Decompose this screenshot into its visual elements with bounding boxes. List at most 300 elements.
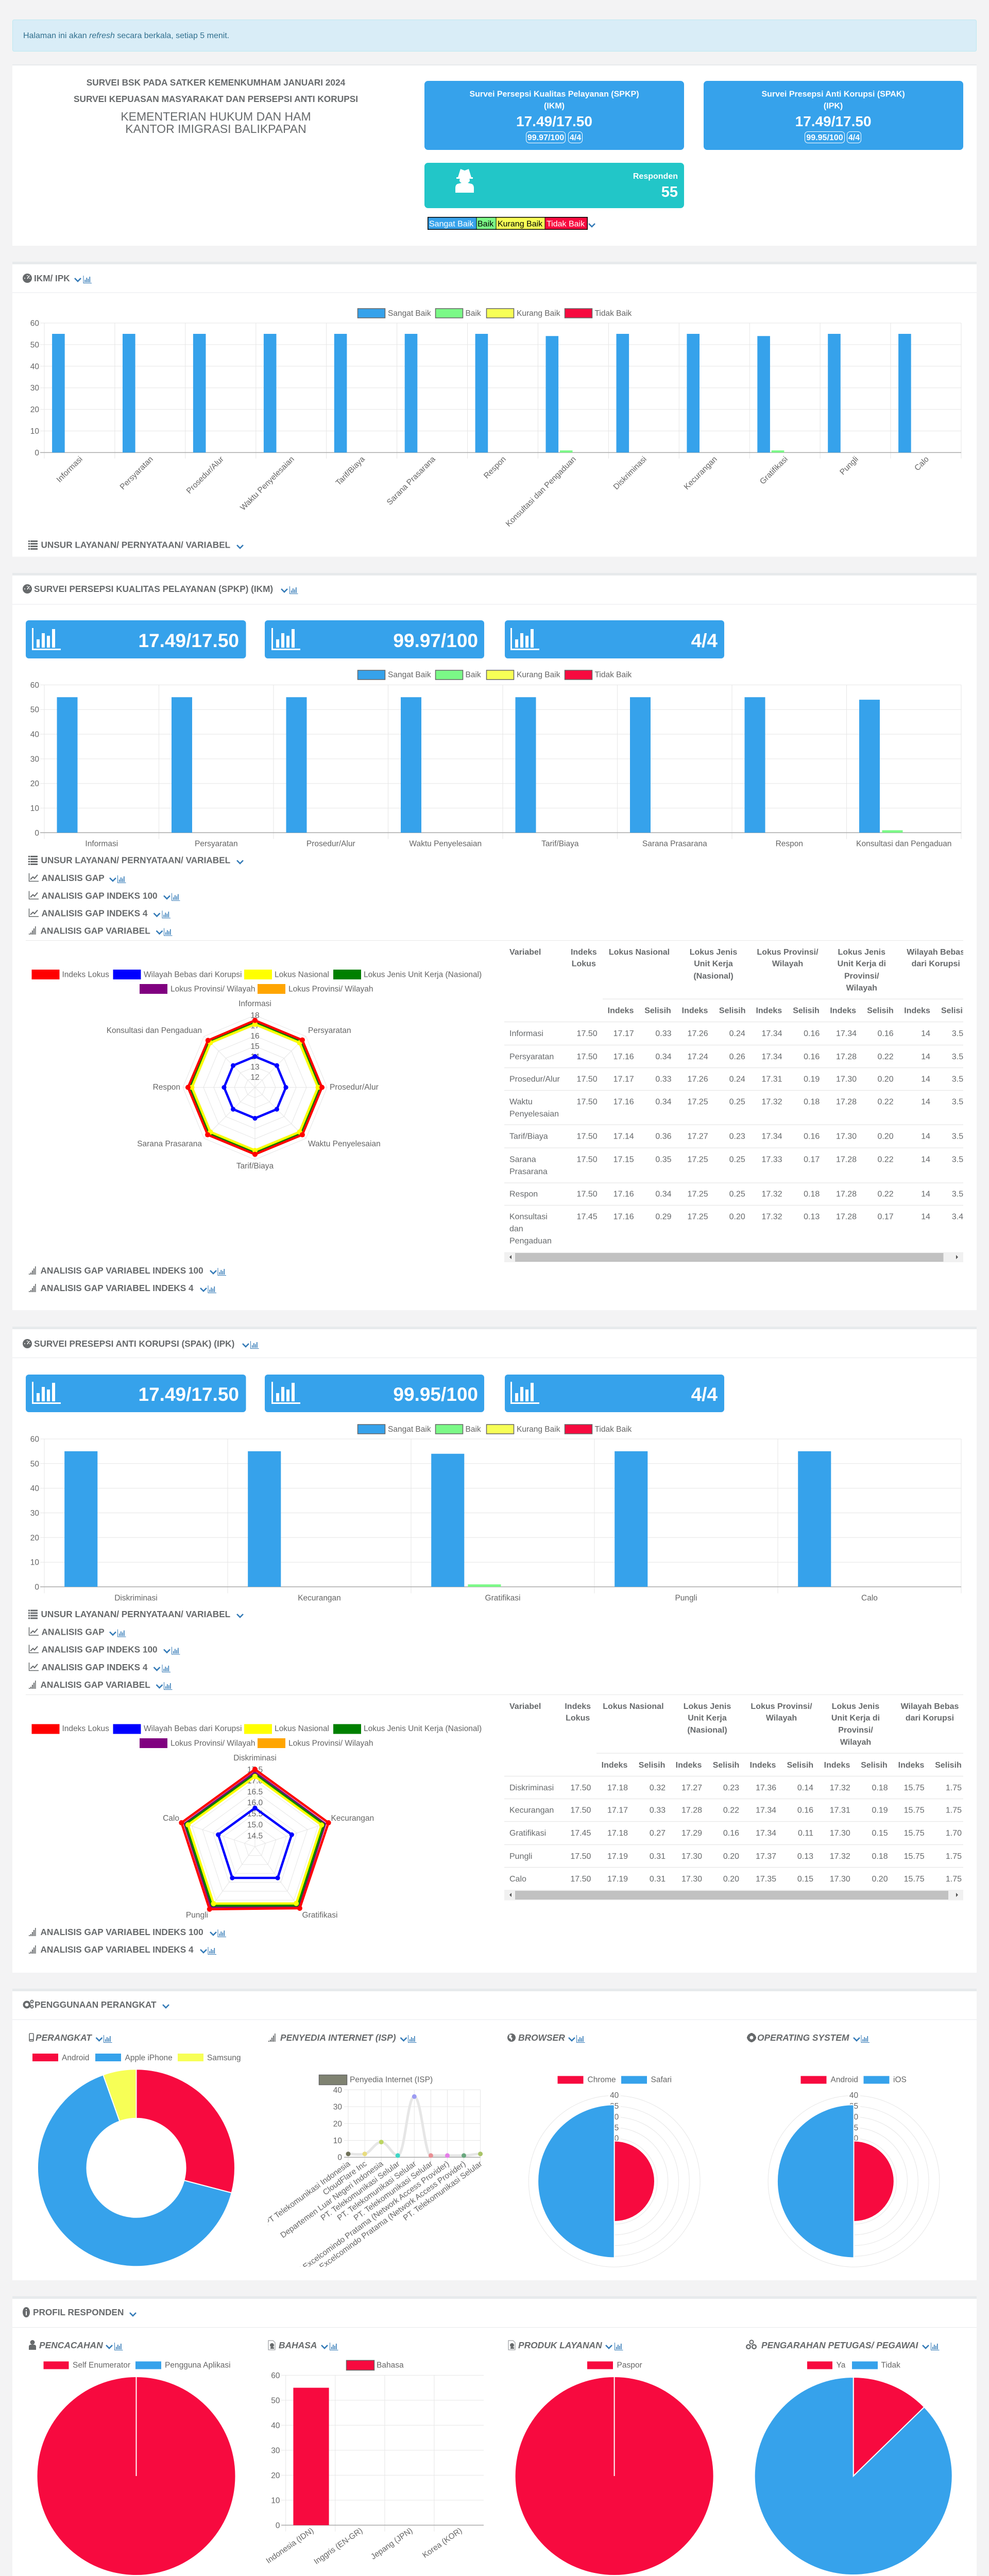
bar chart: SPAK: Kecurangan [298, 1594, 341, 1602]
table: SPKP gap variabel: 0.19 [804, 1075, 820, 1084]
table: SPKP gap variabel: 0.25 [729, 1190, 745, 1198]
bar chart: all variables: Gratifikasi [758, 455, 790, 486]
table: SPKP gap variabel: Konsultasi [509, 1213, 548, 1221]
bar chart: all variables: Pungli [838, 455, 860, 477]
title block: SURVEI KEPUASAN MASYARAKAT DAN PERSEPSI ANTI KORUPSI [74, 94, 358, 104]
bar chart: all variables: 10 [30, 427, 39, 436]
table: SPAK gap variabel: dari Korupsi [906, 1714, 954, 1723]
radar legend: Lokus Provinsi/ Wilayah [288, 985, 373, 993]
table: SPAK gap variabel: 17.27 [681, 1784, 702, 1792]
sub-panel: produk layanan [508, 2340, 713, 2575]
stat card: score [26, 620, 246, 658]
table: SPKP gap variabel: Indeks [608, 1007, 634, 1015]
table: SPAK gap variabel: Selisih [787, 1761, 813, 1770]
table: SPAK gap variabel: Lokus Jenis [832, 1702, 879, 1711]
line chart [263, 2086, 484, 2279]
line chart: PT Telekomunikasi Indonesia [263, 2159, 352, 2227]
heading: PRODUK LAYANAN [518, 2340, 602, 2350]
polar area chart: 30 [610, 2113, 619, 2122]
table: SPKP gap variabel: 17.17 [613, 1075, 634, 1084]
heading: gap variabel indeks 100: ANALISIS GAP VARIABEL INDEKS 100 [40, 1265, 203, 1276]
radar legend: Lokus Provinsi/ Wilayah [288, 1739, 373, 1748]
card: SPKP IKM: 99.97/100 [527, 133, 564, 142]
table: SPKP gap variabel: Unit Kerja di [838, 959, 886, 969]
table: SPKP gap variabel: 0.34 [655, 1190, 672, 1198]
table: SPKP gap variabel: Indeks [756, 1007, 782, 1015]
table: SPAK gap variabel: 17.34 [756, 1829, 776, 1838]
table: SPAK gap variabel: 1.75 [946, 1875, 962, 1884]
table: SPKP gap variabel: 17.50 [577, 1053, 598, 1061]
table: SPAK gap variabel: Wilayah [840, 1738, 871, 1747]
table: SPKP gap variabel: 17.34 [761, 1053, 782, 1061]
table: SPKP gap variabel: Provinsi/ [844, 972, 879, 981]
table: SPKP gap variabel: 0.18 [804, 1097, 820, 1107]
table: SPAK gap variabel: 17.19 [607, 1852, 628, 1861]
line chart: PT. Telekomunikasi Selular [319, 2159, 401, 2223]
bar chart: SPKP [30, 681, 961, 848]
table: SPKP gap variabel: 17.33 [761, 1155, 782, 1164]
table: SPAK gap variabel: 15.75 [904, 1806, 925, 1815]
table: SPKP gap variabel: 0.20 [877, 1075, 894, 1084]
table: SPKP gap variabel: 17.32 [761, 1190, 782, 1198]
legend [319, 2075, 433, 2084]
stat card: score: 17.49/17.50 [139, 1384, 239, 1405]
table: SPKP gap variabel: 17.16 [613, 1190, 634, 1198]
legend: Baik [466, 309, 481, 318]
radar chart: SPAK gap variabel: 15.5 [247, 1809, 263, 1819]
pie chart [516, 2377, 713, 2575]
heading: PERANGKAT [36, 2032, 92, 2043]
table: SPAK gap variabel: 1.75 [946, 1852, 962, 1861]
bar chart: SPAK: Gratifikasi [485, 1594, 520, 1602]
line chart: PT Excelcomindo Pratama (Network Access Provider) [292, 2159, 451, 2279]
table: SPKP gap variabel: 0.20 [729, 1213, 745, 1221]
table: SPAK gap variabel: 15.75 [904, 1829, 925, 1838]
radar chart: SPKP gap variabel: 15 [250, 1042, 260, 1051]
sub-panel: bahasa [265, 2340, 484, 2566]
table: SPAK gap variabel: Indeks [565, 1702, 591, 1711]
bar chart: SPKP: 20 [30, 779, 39, 788]
table: SPKP gap variabel: 17.26 [688, 1029, 708, 1038]
legend: Baik [466, 671, 481, 679]
table: SPKP gap variabel: Selisih [644, 1007, 671, 1015]
table: SPKP gap variabel: 0.16 [804, 1132, 820, 1141]
table: SPKP gap variabel [504, 948, 968, 1246]
line chart: CloudFlare Inc [321, 2159, 369, 2197]
table: SPKP gap variabel: Pengaduan [509, 1236, 552, 1246]
table: SPKP gap variabel: 3.50 [952, 1155, 968, 1164]
bar chart: SPAK: Calo [861, 1594, 878, 1602]
table scrollbar [504, 1890, 963, 1900]
table: SPKP gap variabel: 0.25 [729, 1155, 745, 1164]
table: SPKP gap variabel: Tarif/Biaya [509, 1132, 548, 1141]
heading: IKM/IPK: IKM/ IPK [34, 273, 70, 283]
table: SPAK gap variabel: Diskriminasi [509, 1784, 554, 1792]
table: SPKP gap variabel: 3.50 [952, 1075, 968, 1084]
stat card: index 4 [505, 620, 724, 658]
table: SPKP gap variabel: 0.22 [877, 1053, 894, 1061]
legend: Tidak Baik [594, 671, 632, 679]
legend [587, 2361, 642, 2370]
bar chart: SPKP: 0 [35, 829, 39, 838]
table: SPAK gap variabel: 17.28 [681, 1806, 702, 1815]
table: SPKP gap variabel: 17.50 [577, 1132, 598, 1141]
card: SPKP IKM: (IKM) [544, 102, 565, 110]
table: SPKP gap variabel: Indeks [571, 948, 597, 957]
table: SPKP gap variabel: 17.26 [688, 1075, 708, 1084]
bar chart: SPKP: Tarif/Biaya [541, 840, 579, 848]
table: SPAK gap variabel: Kecurangan [509, 1806, 554, 1815]
table: SPKP gap variabel: 14 [921, 1075, 930, 1084]
table: SPKP gap variabel: 17.50 [577, 1155, 598, 1164]
heading: analisis gap indeks 100: ANALISIS GAP INDEKS 100 [41, 1645, 158, 1655]
radar legend: Indeks Lokus [62, 1724, 109, 1733]
radar chart: SPAK gap variabel: Pungli [186, 1911, 208, 1920]
table: SPKP gap variabel: Lokus [572, 959, 596, 969]
table: SPAK gap variabel: 17.18 [607, 1784, 628, 1792]
table: SPAK gap variabel: Selisih [639, 1761, 665, 1770]
polar area chart: 40 [610, 2091, 619, 2100]
table: SPKP gap variabel: 0.29 [655, 1213, 672, 1221]
table: SPAK gap variabel: Selisih [861, 1761, 888, 1770]
table: SPKP gap variabel: 17.28 [836, 1155, 857, 1164]
radar chart: SPAK gap variabel: 17.0 [247, 1776, 263, 1786]
card: SPAK IPK: 99.95/100 [806, 133, 843, 142]
table: SPAK gap variabel: 0.22 [723, 1806, 739, 1815]
heading: analisis gap: ANALISIS GAP [41, 873, 105, 883]
table: SPKP gap variabel: 17.28 [836, 1053, 857, 1061]
table: SPKP gap variabel: 17.31 [761, 1075, 782, 1084]
line chart: Departemen Luar Negeri Indonesia [279, 2159, 385, 2240]
card: SPAK IPK: 17.49/17.50 [795, 113, 872, 129]
heading: penggunaan perangkat: PENGGUNAAN PERANGKAT [35, 1999, 157, 2010]
legend: rating categories: Sangat Baik [429, 219, 474, 229]
card: responden: Responden [633, 172, 678, 181]
table: SPKP gap variabel: 17.34 [761, 1132, 782, 1141]
table: SPKP gap variabel: Lokus Provinsi/ [757, 948, 819, 957]
alert: refresh notice: Halaman ini akan refresh secara berkala, setiap 5 menit. [23, 31, 229, 40]
legend: Sangat Baik [388, 309, 431, 318]
bar chart: Jepang (JPN) [369, 2526, 414, 2562]
table: SPKP gap variabel: Unit Kerja [694, 959, 733, 969]
table: SPKP gap variabel: Selisih [719, 1007, 745, 1015]
table: SPAK gap variabel: 17.30 [830, 1829, 850, 1838]
bar chart: SPKP: 60 [30, 681, 39, 690]
heading [29, 2032, 112, 2043]
radar legend: Lokus Provinsi/ Wilayah [170, 1739, 255, 1748]
table: SPAK gap variabel: 0.15 [872, 1829, 888, 1838]
table: SPAK gap variabel: 17.31 [830, 1806, 850, 1815]
table: SPAK gap variabel: 0.27 [650, 1829, 666, 1838]
table: SPAK gap variabel: 0.31 [650, 1852, 666, 1861]
table: SPKP gap variabel: Lokus Jenis [690, 948, 737, 957]
heading: unsur layanan: UNSUR LAYANAN/ PERNYATAAN/ VARIABEL [41, 540, 230, 550]
heading: analisis gap variabel: ANALISIS GAP VARIABEL [40, 1680, 150, 1690]
bar chart: SPAK: Diskriminasi [114, 1594, 158, 1602]
bar chart: 0 [276, 2521, 280, 2530]
table: SPAK gap variabel: Wilayah Bebas [901, 1702, 959, 1711]
table: SPKP gap variabel: 0.16 [877, 1029, 894, 1038]
table: SPAK gap variabel: Gratifikasi [509, 1829, 546, 1838]
table: SPAK gap variabel: Calo [509, 1875, 526, 1884]
table: SPKP gap variabel: 0.20 [877, 1132, 894, 1141]
legend [32, 2054, 241, 2062]
table: SPAK gap variabel: Indeks [824, 1761, 850, 1770]
bar chart: 60 [271, 2371, 280, 2380]
table: SPAK gap variabel: 0.16 [723, 1829, 739, 1838]
bar chart: SPAK [30, 1435, 961, 1602]
polar area chart: 20 [849, 2134, 858, 2143]
icon: user secret [455, 169, 474, 193]
table: SPKP gap variabel: 17.16 [613, 1097, 634, 1107]
table: SPKP gap variabel: 0.17 [877, 1213, 894, 1221]
radar chart: SPAK gap variabel: 17.5 [247, 1766, 263, 1774]
table: SPAK gap variabel: 17.50 [570, 1852, 591, 1861]
radar chart: SPAK gap variabel: Gratifikasi [302, 1911, 337, 1920]
card: SPAK IPK: (IPK) [824, 102, 843, 110]
table: SPKP gap variabel: Selisih [941, 1007, 968, 1015]
radar chart: SPKP gap variabel: 14 [250, 1053, 260, 1061]
table: SPKP gap variabel: 0.22 [877, 1155, 894, 1164]
title block: KANTOR IMIGRASI BALIKPAPAN [125, 122, 306, 135]
table: SPAK gap variabel: 0.31 [650, 1875, 666, 1884]
table: SPAK gap variabel: Selisih [713, 1761, 739, 1770]
radar chart: SPAK gap variabel: 15.0 [247, 1821, 263, 1829]
stat card: index 100: 99.95/100 [393, 1384, 478, 1405]
table: SPAK gap variabel: Provinsi/ [838, 1726, 873, 1735]
table: SPAK gap variabel: 17.32 [830, 1784, 850, 1792]
table: SPAK gap variabel: 0.20 [723, 1875, 739, 1884]
table: SPAK gap variabel: 0.13 [797, 1852, 813, 1861]
table: SPAK gap variabel: 1.75 [946, 1806, 962, 1815]
radar legend: Lokus Nasional [275, 1724, 329, 1733]
table: SPKP gap variabel: Sarana [509, 1155, 536, 1164]
table: SPAK gap variabel: 0.32 [650, 1784, 666, 1792]
heading: OPERATING SYSTEM [757, 2032, 849, 2043]
panel: SPKP IKM [12, 573, 977, 1310]
table: SPKP gap variabel: 0.22 [877, 1190, 894, 1198]
table: SPKP gap variabel: Respon [509, 1190, 538, 1198]
table: SPKP gap variabel: 17.30 [836, 1132, 857, 1141]
table: SPAK gap variabel: 0.33 [650, 1806, 666, 1815]
table: SPAK gap variabel: 1.75 [946, 1784, 962, 1792]
table: SPAK gap variabel: 17.37 [756, 1852, 776, 1861]
bar chart: SPKP: Respon [776, 840, 803, 848]
legend: rating categories: Tidak Baik [547, 219, 585, 229]
polar area chart [768, 2091, 940, 2267]
table: SPKP gap variabel: 17.25 [688, 1097, 708, 1107]
radar chart: SPKP gap variabel: Respon [153, 1083, 180, 1092]
table scrollbar [504, 1252, 963, 1262]
legend: Chrome [587, 2075, 616, 2084]
legend: Bahasa [377, 2361, 404, 2370]
polar area chart: 30 [849, 2113, 858, 2122]
radar chart: SPKP gap variabel: Konsultasi dan Pengaduan [107, 1026, 202, 1035]
bar chart: SPAK: 30 [30, 1509, 39, 1518]
bar chart: SPKP: 10 [30, 804, 39, 813]
bar chart: SPKP: 30 [30, 755, 39, 764]
table: SPAK gap variabel: Indeks [602, 1761, 627, 1770]
heading: gap variabel indeks 4: ANALISIS GAP VARIABEL INDEKS 4 [40, 1283, 194, 1293]
table: SPAK gap variabel: 17.45 [570, 1829, 591, 1838]
table: SPAK gap variabel: Indeks [676, 1761, 702, 1770]
table: SPKP gap variabel: 0.17 [804, 1155, 820, 1164]
table: SPAK gap variabel: 17.34 [756, 1806, 776, 1815]
table: SPAK gap variabel: 0.19 [872, 1806, 888, 1815]
bar chart: 10 [271, 2496, 280, 2505]
table: SPAK gap variabel: 17.32 [830, 1852, 850, 1861]
table: SPAK gap variabel: 0.18 [872, 1784, 888, 1792]
stat card: index 100 [265, 620, 484, 658]
heading [29, 2340, 123, 2350]
heading: analisis gap variabel: ANALISIS GAP VARIABEL [40, 925, 150, 936]
table: SPKP gap variabel: 14 [921, 1097, 930, 1107]
table: SPKP gap variabel: (Nasional) [693, 972, 734, 981]
radar chart: SPKP gap variabel: 18 [250, 1011, 260, 1020]
line chart: PT. Telekomunikasi Selular [352, 2159, 434, 2223]
bar chart: all variables: Calo [913, 455, 931, 472]
bar chart: SPAK: 10 [30, 1558, 39, 1567]
bar chart: Indonesia (IDN) [265, 2526, 315, 2566]
title block: KEMENTERIAN HUKUM DAN HAM [121, 110, 311, 123]
title block: SURVEI BSK PADA SATKER KEMENKUMHAM JANUARI 2024 [87, 77, 346, 88]
card: SPAK IPK [704, 81, 963, 150]
bar chart: Inggris (EN-GR) [313, 2526, 364, 2566]
sub-panel: ISP [263, 2032, 484, 2279]
bar chart: SPKP: Sarana Prasarana [642, 840, 707, 848]
pie chart [755, 2377, 952, 2575]
table: SPAK gap variabel: Selisih [935, 1761, 962, 1770]
panel: SPAK IPK [12, 1327, 977, 1973]
heading: unsur layanan: UNSUR LAYANAN/ PERNYATAAN/ VARIABEL [41, 855, 230, 866]
radar legend: Wilayah Bebas dari Korupsi [144, 971, 242, 979]
legend: Android [62, 2054, 89, 2062]
legend [346, 2361, 404, 2370]
table: SPKP gap variabel: Selisih [867, 1007, 894, 1015]
bar chart: SPAK: 60 [30, 1435, 39, 1444]
radar chart: SPKP gap variabel: 16 [250, 1032, 260, 1041]
radar legend: Lokus Nasional [275, 971, 329, 979]
legend: iOS [893, 2075, 907, 2084]
table: SPKP gap variabel: Lokus Nasional [609, 948, 670, 957]
heading: analisis gap indeks 100: ANALISIS GAP INDEKS 100 [41, 890, 158, 901]
table: SPKP gap variabel: Prosedur/Alur [509, 1075, 560, 1084]
legend: Samsung [207, 2054, 241, 2062]
table: SPAK gap variabel: Indeks [750, 1761, 776, 1770]
table: SPKP gap variabel: 3.45 [952, 1213, 968, 1221]
polar area chart: 40 [849, 2091, 858, 2100]
polar area chart: 25 [849, 2124, 858, 2132]
table: SPAK gap variabel: Lokus Jenis [684, 1702, 731, 1711]
bar chart: all variables: Diskriminasi [612, 455, 649, 492]
card: SPKP IKM [424, 81, 684, 150]
bar chart: SPAK: 50 [30, 1460, 39, 1468]
table: SPKP gap variabel: 0.22 [877, 1097, 894, 1107]
legend [807, 2361, 900, 2370]
bar chart: all variables: 0 [35, 449, 39, 457]
table: SPAK gap variabel: Unit Kerja [688, 1714, 727, 1723]
stat card: index 100 [265, 1375, 484, 1412]
bar chart: 50 [271, 2396, 280, 2405]
donut chart [38, 2069, 235, 2266]
legend: Self Enumerator [73, 2361, 130, 2370]
radar legend: Indeks Lokus [62, 971, 109, 979]
legend: Baik [466, 1425, 481, 1434]
table: SPKP gap variabel: 0.25 [729, 1097, 745, 1107]
table: SPAK gap variabel: 0.18 [872, 1852, 888, 1861]
heading: analisis gap indeks 4: ANALISIS GAP INDEKS 4 [41, 908, 148, 918]
panel: device usage [12, 1989, 977, 2280]
table: SPKP gap variabel: 0.26 [729, 1053, 745, 1061]
table: SPKP gap variabel: 17.17 [613, 1029, 634, 1038]
bar chart: 40 [271, 2421, 280, 2430]
line chart: 20 [333, 2120, 342, 2128]
line chart: 30 [333, 2103, 342, 2111]
table: SPAK gap variabel: 0.11 [798, 1829, 813, 1838]
table: SPKP gap variabel: Wilayah Bebas [907, 948, 965, 957]
bar chart: Korea (KOR) [421, 2526, 464, 2560]
table: SPKP gap variabel: 0.33 [655, 1029, 672, 1038]
heading: gap variabel indeks 100: ANALISIS GAP VARIABEL INDEKS 100 [40, 1927, 203, 1937]
heading [268, 2340, 338, 2350]
table: SPKP gap variabel: 17.45 [577, 1213, 598, 1221]
table: SPKP gap variabel: 17.34 [836, 1029, 857, 1038]
table: SPAK gap variabel: (Nasional) [687, 1726, 727, 1735]
table: SPKP gap variabel: 0.24 [729, 1029, 745, 1038]
panel: survey summary [12, 64, 977, 246]
polar area chart: 20 [610, 2134, 619, 2143]
card: SPAK IPK: Survei Presepsi Anti Korupsi (SPAK) [761, 90, 905, 99]
radar chart: SPKP gap variabel: 12 [250, 1073, 260, 1082]
bar chart [265, 2371, 484, 2566]
radar chart: SPAK gap variabel: 16.0 [247, 1799, 263, 1807]
legend: Tidak Baik [594, 1425, 632, 1434]
table: SPKP gap variabel: 14 [921, 1190, 930, 1198]
stat card: index 4: 4/4 [691, 1384, 718, 1405]
radar chart: SPAK gap variabel: Calo [163, 1814, 179, 1823]
radar chart: SPKP gap variabel [107, 999, 381, 1171]
table: SPKP gap variabel: 0.16 [804, 1053, 820, 1061]
table: SPKP gap variabel: 17.34 [761, 1029, 782, 1038]
table: SPKP gap variabel: 3.50 [952, 1029, 968, 1038]
heading: analisis gap [29, 873, 126, 883]
legend [43, 2361, 231, 2370]
table: SPKP gap variabel: 17.50 [577, 1190, 598, 1198]
heading: gap variabel indeks 4: ANALISIS GAP VARIABEL INDEKS 4 [40, 1944, 194, 1955]
table: SPKP gap variabel: 14 [921, 1155, 930, 1164]
card: SPAK IPK: 4/4 [848, 133, 860, 142]
table: SPAK gap variabel: 15.75 [904, 1852, 925, 1861]
table: SPAK gap variabel: Indeks [898, 1761, 924, 1770]
bar chart: SPAK: 40 [30, 1484, 39, 1493]
heading: BAHASA [279, 2340, 317, 2350]
bar chart: 20 [271, 2471, 280, 2480]
bar chart: SPKP: Informasi [85, 840, 118, 848]
heading [507, 2032, 585, 2043]
bar chart: all variables: 20 [30, 405, 39, 414]
legend: Penyedia Internet (ISP) [350, 2075, 433, 2084]
bar chart: all variables: Waktu Penyelesaian [238, 455, 296, 512]
legend: Paspor [617, 2361, 642, 2370]
table: SPAK gap variabel: 17.36 [756, 1784, 776, 1792]
table: SPAK gap variabel: Lokus Nasional [603, 1702, 664, 1711]
bar chart: all variables: Sarana Prasarana [385, 455, 437, 507]
table: SPKP gap variabel: dan [509, 1225, 523, 1233]
sub-panel: pencacahan [29, 2340, 235, 2575]
table: SPKP gap variabel: 17.15 [613, 1155, 634, 1164]
heading: profil responden: PROFIL RESPONDEN [33, 2307, 124, 2317]
line chart: 40 [333, 2086, 342, 2095]
